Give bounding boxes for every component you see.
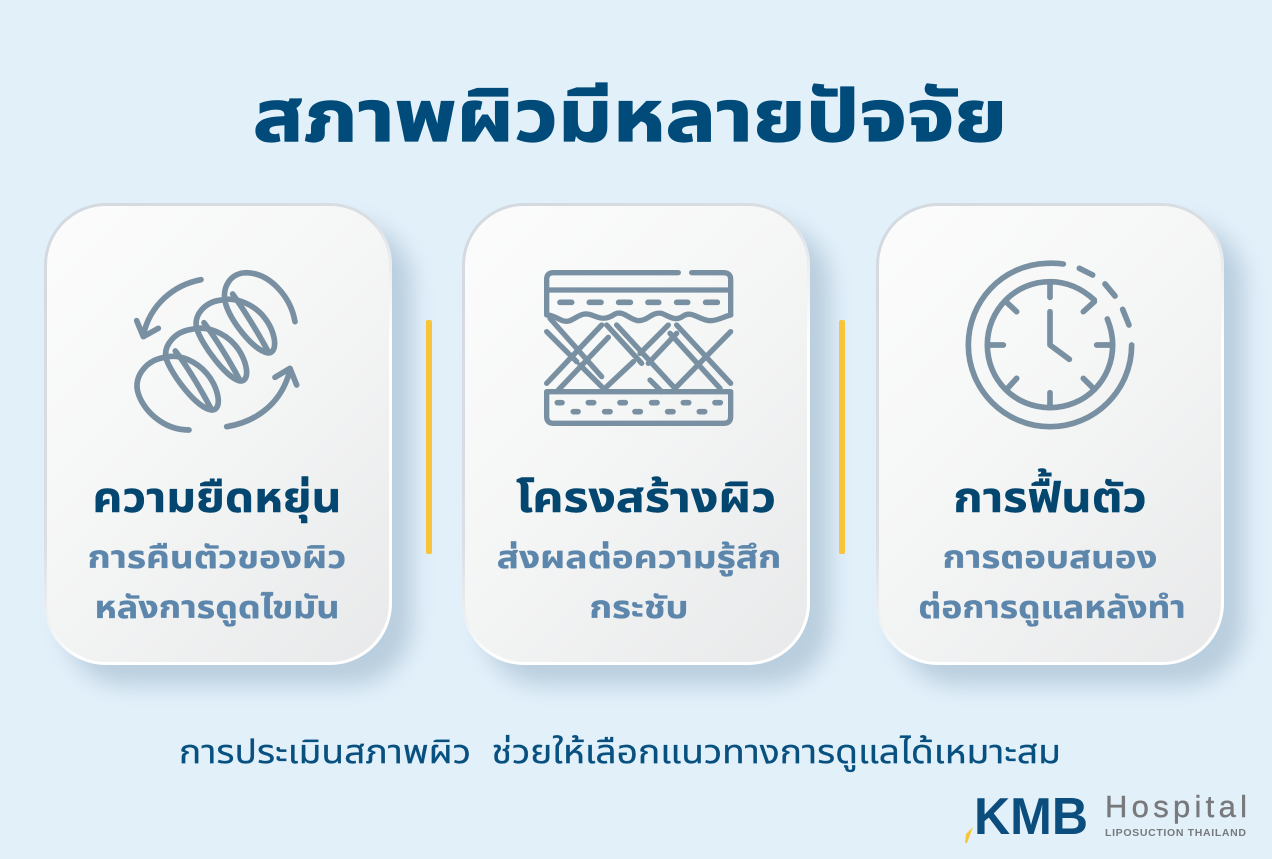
logo: KMB Hospital <box>965 788 1247 846</box>
panel: recovery <box>876 203 1224 665</box>
text: elasticity description line 1: การคืนตัวของผิว <box>88 540 346 575</box>
heading: skin structure: โครงสร้างผิว <box>516 474 776 521</box>
text: elasticity description line 2: หลังการดูดไขมัน <box>95 590 339 625</box>
icon: skin layers <box>544 270 734 426</box>
footer text: การประเมินสภาพผิว ช่วยให้เลือกแนวทางการดูแลได้เหมาะสม <box>179 733 1061 770</box>
divider: right yellow bar <box>839 320 845 554</box>
text: structure description line 2: กระชับ <box>589 590 688 625</box>
heading: elasticity: ความยืดหยุ่น <box>92 474 341 521</box>
logo wordmark: KMB <box>974 788 1088 846</box>
heading: recovery: การฟื้นตัว <box>953 474 1147 521</box>
logo tagline: LIPOSUCTION THAILAND <box>1105 827 1246 839</box>
text: structure description line 1: ส่งผลต่อความรู้สึก <box>496 540 781 575</box>
title: สภาพผิวมีหลายปัจจัย <box>253 77 1007 157</box>
text: recovery description line 1: การตอบสนอง <box>943 540 1157 575</box>
divider: left yellow bar <box>426 320 432 554</box>
logo accent <box>965 827 973 843</box>
panel: elasticity <box>44 203 392 665</box>
icon: spring with arrows <box>134 270 300 433</box>
panel: skin structure <box>462 203 810 665</box>
icon: clock <box>966 260 1134 430</box>
logo hospital text: Hospital <box>1105 789 1247 824</box>
text: recovery description line 2: ต่อการดูแลหลังทำ <box>918 590 1185 625</box>
